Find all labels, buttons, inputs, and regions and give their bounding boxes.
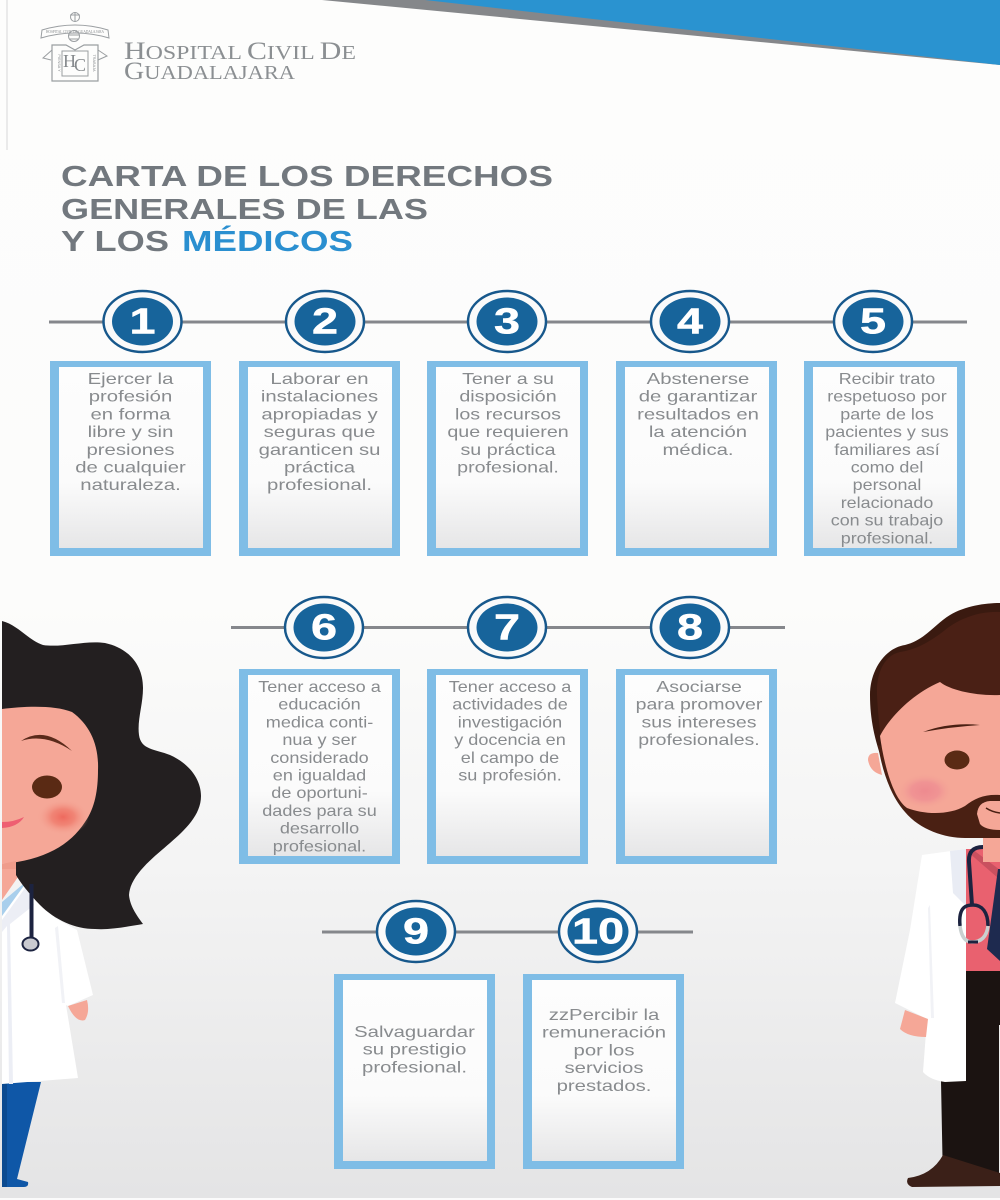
item 1: profesión	[89, 387, 172, 405]
item 9: Salvaguardar	[354, 1022, 475, 1040]
item 2	[239, 291, 400, 556]
item 2: 2	[312, 301, 338, 341]
item 2: práctica	[284, 458, 356, 476]
man tie	[987, 869, 1000, 961]
item 1: Ejercer la	[88, 369, 174, 387]
title	[61, 161, 553, 258]
illustration: male doctor	[868, 603, 1000, 1187]
item 5: como del	[851, 458, 923, 476]
item 4: resultados en	[637, 405, 759, 423]
item 4: Abstenerse	[647, 369, 749, 387]
item 6: dades para su	[262, 802, 377, 820]
woman stethoscope	[22, 884, 38, 950]
man eye	[944, 750, 970, 770]
item 7: investigación	[458, 713, 562, 731]
item 5: relacionado	[841, 494, 933, 512]
item 2: instalaciones	[261, 387, 378, 405]
item 6: medica conti-	[266, 713, 373, 731]
man hair	[870, 603, 1000, 760]
item 7: y docencia en	[454, 731, 566, 749]
top corner ribbon	[322, 0, 1000, 65]
item 1: en forma	[90, 405, 171, 423]
item 10: remuneración	[542, 1023, 666, 1041]
item 4: de garantizar	[639, 387, 757, 405]
item 9	[334, 901, 495, 1169]
item 6: 6	[311, 607, 337, 647]
item 8: Asociarse	[656, 678, 742, 696]
hospital name: HOSPITAL CIVIL DE	[124, 38, 356, 65]
item 5: 5	[860, 301, 886, 341]
item 3: profesional.	[457, 458, 559, 476]
item 3: Tener a su	[462, 370, 554, 388]
item 2: garanticen su	[259, 440, 380, 458]
title: GENERALES DE LAS	[61, 194, 428, 226]
item 1: libre y sin	[88, 422, 173, 441]
item 6: educación	[278, 696, 361, 713]
item 7: su profesión.	[458, 766, 562, 784]
woman cheek	[37, 799, 89, 835]
item 3: los recursos	[455, 405, 561, 423]
woman neck	[2, 864, 18, 900]
man shirt	[966, 849, 1000, 971]
item 6	[239, 597, 400, 864]
illustration: female doctor	[2, 621, 201, 1187]
hospital name	[124, 38, 356, 85]
item 6: desarrollo	[280, 820, 359, 837]
hospital name: GUADALAJARA	[124, 58, 296, 85]
title: CARTA DE LOS DERECHOS	[61, 161, 553, 193]
hospital crest logo	[41, 12, 109, 81]
man leg gap	[999, 1025, 1000, 1173]
item 5: personal	[853, 476, 921, 494]
timeline row 1	[49, 320, 967, 324]
title: Y LOS	[61, 226, 169, 258]
item 3: que requieren	[447, 423, 569, 441]
item 2: profesional.	[267, 475, 372, 494]
item 9: su prestigio	[363, 1040, 466, 1058]
man hand	[900, 1010, 928, 1037]
item 8: sus intereses	[642, 713, 757, 731]
item 1: naturaleza.	[80, 475, 181, 494]
title: MÉDICOS	[182, 224, 353, 258]
man ear	[868, 753, 882, 775]
item 8: 8	[677, 607, 703, 647]
item 10: zzPercibir la	[549, 1005, 660, 1023]
item 10: por los	[574, 1041, 634, 1059]
item 6: de oportuni-	[271, 784, 368, 802]
man eyebrow	[923, 724, 980, 732]
item 5: profesional.	[841, 529, 933, 547]
man coat	[895, 849, 966, 1082]
item 7: 7	[494, 607, 520, 647]
hospital crest logo: C	[74, 55, 86, 75]
item 5: Recibir trato	[839, 370, 935, 388]
item 8: profesionales.	[638, 731, 760, 749]
item 2: Laborar en	[270, 369, 369, 387]
woman face	[2, 707, 98, 864]
item 10: 10	[572, 911, 624, 951]
item 4	[616, 291, 777, 556]
woman mouth	[2, 817, 24, 828]
item 3: su práctica	[460, 441, 556, 458]
item 3	[427, 291, 588, 556]
item 8	[616, 597, 777, 864]
item 7: actividades de	[452, 696, 568, 713]
item 5: respetuoso por	[827, 388, 947, 405]
item 1: presiones	[86, 440, 175, 458]
woman coat	[2, 880, 93, 1084]
item 10: prestados.	[557, 1076, 651, 1094]
item 5: con su trabajo	[831, 511, 943, 529]
item 6: considerado	[270, 749, 369, 767]
man stethoscope	[960, 847, 988, 942]
item 10: servicios	[565, 1058, 643, 1077]
woman hair	[2, 621, 201, 929]
item 1	[50, 291, 211, 556]
man lips	[977, 801, 1000, 830]
man shoe	[907, 1155, 1000, 1187]
hospital crest logo: PIENSA Y	[57, 54, 61, 72]
item 5	[804, 291, 965, 556]
item 1: 1	[129, 301, 156, 341]
item 8: para promover	[636, 695, 762, 713]
item 5: parte de los	[840, 405, 934, 423]
item 9: 9	[403, 911, 429, 951]
item 4: 4	[677, 301, 703, 341]
item 7: el campo de	[461, 749, 559, 767]
item 3: 3	[494, 301, 520, 341]
man neck	[983, 836, 1000, 862]
man cheek	[897, 773, 953, 809]
woman eyebrow	[21, 735, 72, 751]
item 9: profesional.	[362, 1058, 467, 1076]
hospital crest logo: H	[63, 51, 76, 71]
item 2: seguras que	[264, 422, 375, 441]
item 1: de cualquier	[75, 458, 186, 476]
man beard	[878, 745, 1000, 838]
item 6: Tener acceso a	[258, 678, 381, 696]
item 7	[427, 597, 588, 864]
man mouth	[986, 808, 1000, 813]
item 6: profesional.	[273, 837, 366, 855]
item 6: en igualdad	[273, 766, 366, 784]
item 7: Tener acceso a	[449, 678, 572, 696]
hospital crest logo: TRABAJA	[92, 54, 96, 72]
hospital crest logo: HOSPITAL CIVIL DE GUADALAJARA	[46, 29, 105, 34]
item 2: apropiadas y	[261, 405, 379, 423]
woman neck shadow	[2, 861, 16, 869]
item 4: médica.	[662, 440, 734, 458]
item 10	[523, 901, 684, 1169]
man pants	[941, 971, 1000, 1185]
item 5: pacientes y sus	[825, 423, 949, 441]
timeline row 2	[231, 626, 785, 629]
man face	[880, 682, 1000, 813]
item 5: familiares así	[834, 441, 940, 459]
woman eye	[32, 776, 62, 798]
item 3: disposición	[459, 387, 557, 405]
woman pants	[2, 1082, 41, 1187]
item 4: la atención	[649, 422, 747, 441]
timeline row 3	[322, 930, 693, 934]
item 6: nua y ser	[282, 731, 357, 749]
woman hand	[68, 1000, 88, 1020]
